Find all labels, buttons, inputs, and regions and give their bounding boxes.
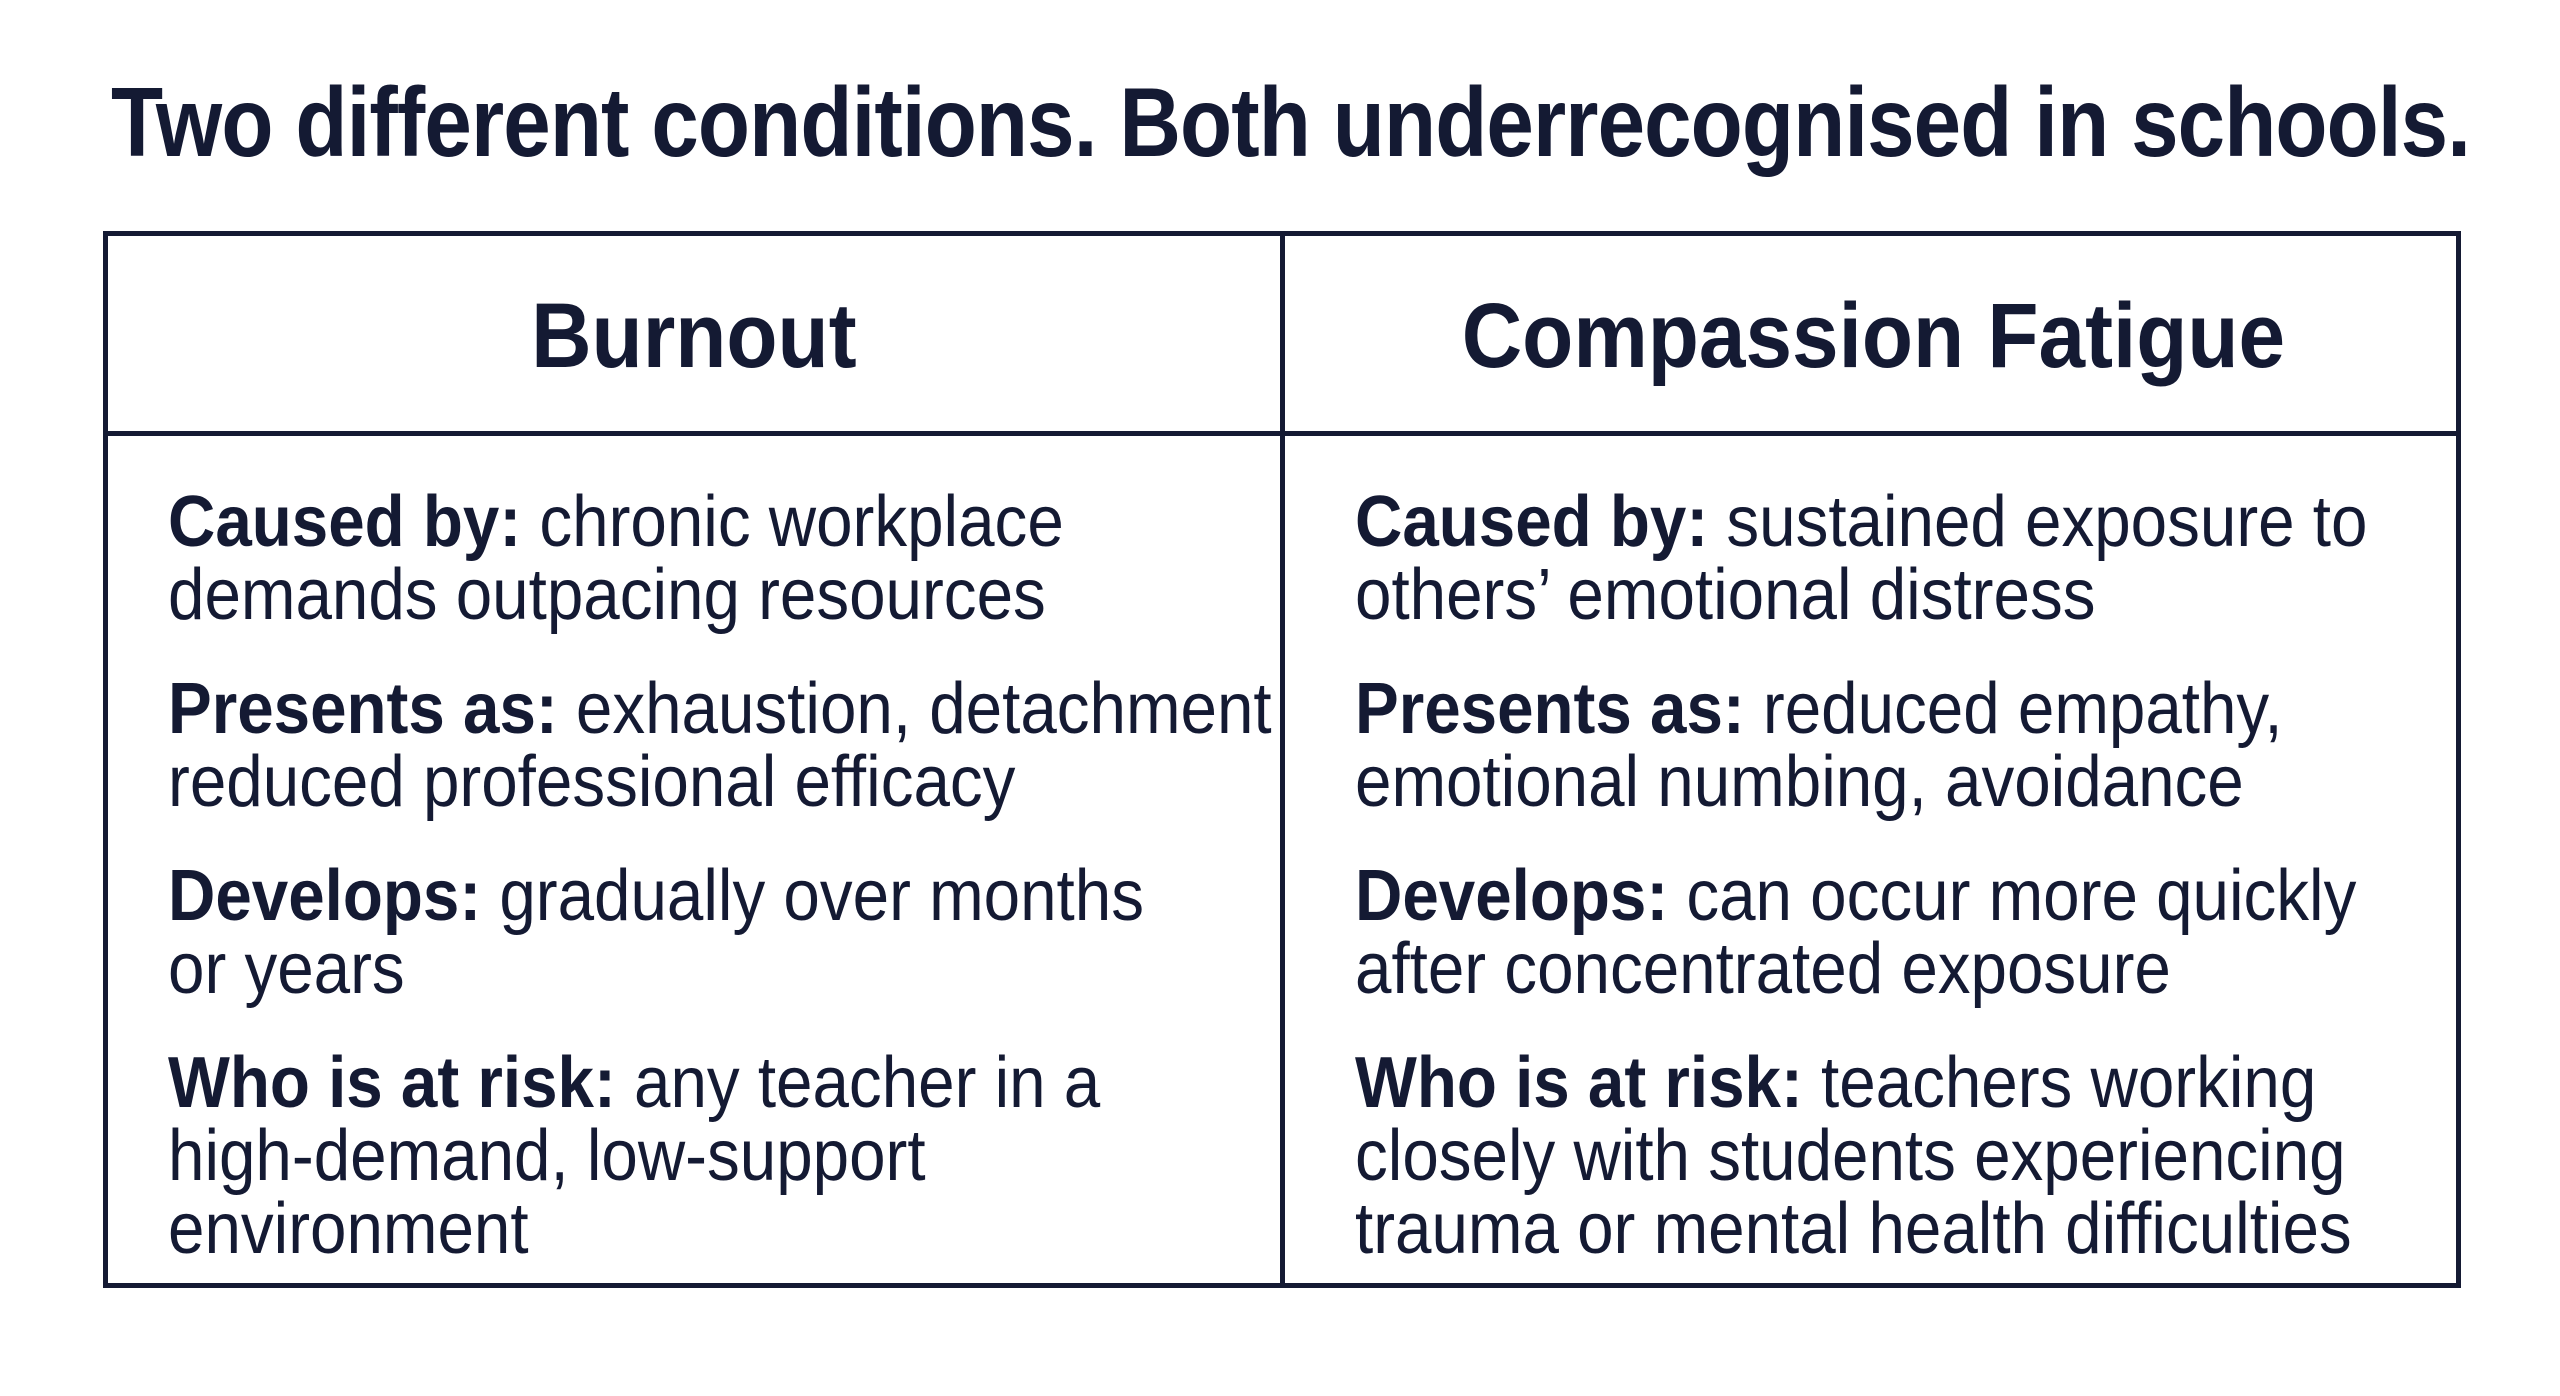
header: Burnout: Burnout — [531, 285, 857, 387]
comparison table — [103, 231, 2461, 1288]
compassion fatigue presents as — [1355, 669, 2283, 822]
burnout who is at risk: environment — [168, 1189, 529, 1269]
compassion fatigue caused by: others’ emotional distress — [1355, 555, 2095, 635]
burnout presents as — [168, 669, 1272, 822]
burnout develops — [168, 856, 1144, 1009]
burnout caused by: Caused by: chronic workplace — [168, 482, 1064, 562]
header: Compassion Fatigue: Compassion Fatigue — [1461, 285, 2285, 387]
compassion fatigue presents as: emotional numbing, avoidance — [1355, 742, 2244, 822]
compassion fatigue caused by: Caused by: sustained exposure to — [1355, 482, 2367, 562]
burnout presents as: Presents as: exhaustion, detachment — [168, 669, 1272, 749]
column: compassion fatigue details — [1355, 482, 2367, 1269]
title: Two different conditions. Both underrecognised in schools. — [111, 67, 2470, 177]
burnout caused by: demands outpacing resources — [168, 555, 1046, 635]
burnout who is at risk — [168, 1043, 1100, 1269]
compassion fatigue who is at risk: trauma or mental health difficulties — [1355, 1189, 2352, 1269]
compassion fatigue develops: after concentrated exposure — [1355, 929, 2171, 1009]
burnout develops: or years — [168, 929, 405, 1009]
burnout caused by — [168, 482, 1064, 635]
burnout presents as: reduced professional efficacy — [168, 742, 1015, 822]
compassion fatigue develops — [1355, 856, 2356, 1009]
compassion fatigue presents as: Presents as: reduced empathy, — [1355, 669, 2283, 749]
compassion fatigue caused by — [1355, 482, 2367, 635]
burnout who is at risk: Who is at risk: any teacher in a — [168, 1043, 1100, 1123]
compassion fatigue who is at risk: Who is at risk: teachers working — [1355, 1043, 2316, 1123]
compassion fatigue who is at risk: closely with students experiencing — [1355, 1116, 2346, 1196]
burnout who is at risk: high-demand, low-support — [168, 1116, 926, 1196]
compassion fatigue develops: Develops: can occur more quickly — [1355, 856, 2356, 936]
compassion fatigue who is at risk — [1355, 1043, 2352, 1269]
burnout develops: Develops: gradually over months — [168, 856, 1144, 936]
column: burnout details — [168, 482, 1272, 1269]
